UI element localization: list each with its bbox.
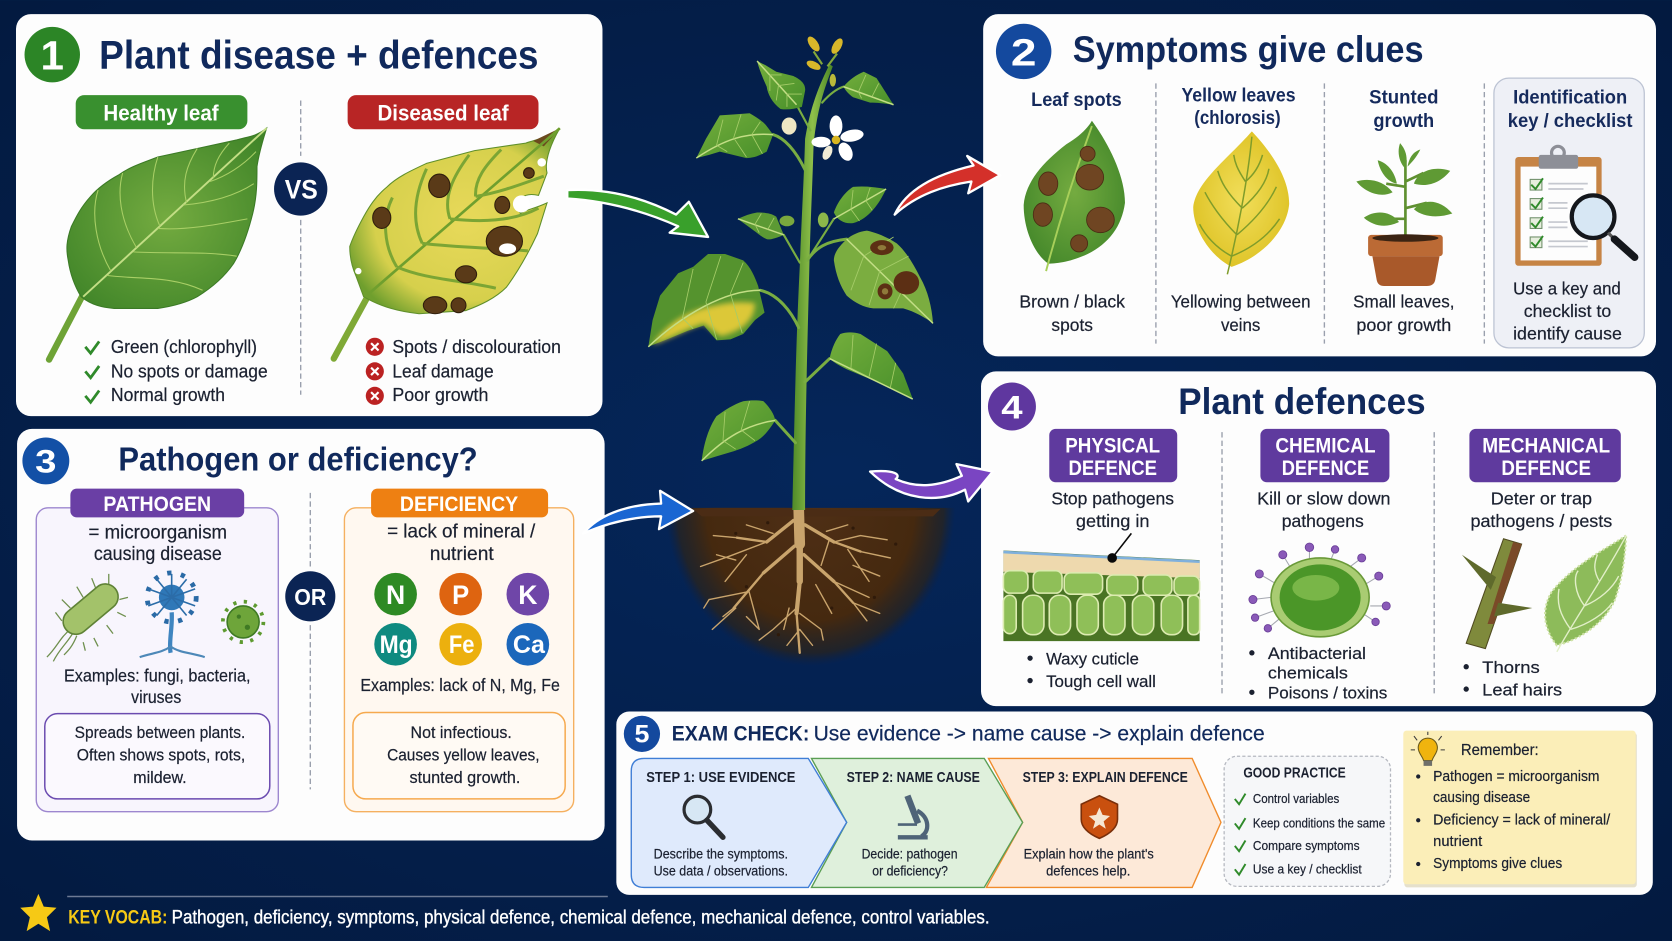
caption: leaf spots: Brown / black: [1019, 291, 1125, 311]
nutrient badges: Fe: [449, 632, 475, 659]
caption: stunted growth: Small leaves,: [1353, 291, 1454, 311]
caption: yellow leaves: [1171, 291, 1311, 335]
badge 1: 1: [41, 33, 64, 79]
badge 4: 4: [1001, 389, 1023, 425]
icon: star: [20, 894, 57, 931]
mechanical defence list: Thorns: [1482, 658, 1540, 677]
column: physical defence: Stop pathogens: [1051, 489, 1174, 509]
label: diseased leaf: [348, 95, 538, 129]
step 3 chevron: Explain how the plant's: [1024, 846, 1154, 862]
deficiency definition: [387, 522, 536, 565]
deficiency note: [353, 713, 565, 799]
label: healthy leaf: Healthy leaf: [103, 101, 219, 126]
list: disease traits: Poor growth: [392, 385, 488, 405]
yellow buds: [805, 35, 845, 87]
pathogen definition: causing disease: [94, 544, 222, 565]
remember note: causing disease: [1433, 789, 1530, 806]
icon: bacterium: [47, 574, 128, 661]
physical defence header: PHYSICAL: [1065, 433, 1160, 457]
caption: yellow leaves: Yellowing between: [1171, 291, 1311, 311]
leaf: top left: [757, 61, 810, 130]
deficiency note: Not infectious.: [411, 723, 512, 742]
panel 3: pathogen or deficiency: [17, 429, 605, 841]
mechanical defence list: Leaf hairs: [1482, 680, 1562, 699]
key vocab text: Pathogen, deficiency, symptoms, physical defence, chemical defence, mechanical defence, control variables.: [172, 908, 990, 929]
illustration: healthy leaf: [49, 128, 267, 360]
diagram: leaf cell layers: [1003, 533, 1200, 641]
physical defence list: Waxy cuticle: [1046, 650, 1139, 669]
lesion spots: [373, 168, 534, 314]
vs badge: [274, 162, 327, 216]
leaf: upper left: [696, 113, 805, 170]
icon: potted plant: [1356, 143, 1452, 286]
pathogen note: mildew.: [133, 768, 187, 787]
box: identification key: Use a key and: [1513, 279, 1621, 299]
nutrient badges: Ca: [513, 632, 545, 659]
remember note: Symptoms give clues: [1433, 855, 1562, 872]
badge 2: [996, 24, 1051, 79]
icon: thorny stem: [1462, 539, 1532, 649]
vs badge: VS: [285, 175, 318, 205]
chemical defence header: [1260, 429, 1389, 482]
nutrient badges: [374, 573, 549, 666]
list: healthy traits: Green (chlorophyll): [111, 337, 257, 357]
box: pathogen: [36, 489, 278, 812]
arrow: red: [895, 156, 1000, 215]
nutrient badges: N: [386, 580, 405, 610]
flower: [811, 115, 865, 163]
leaf: lower right: [805, 332, 913, 399]
step 2 chevron: Decide: pathogen: [862, 846, 958, 862]
badge 3: [22, 437, 69, 484]
badge 1: [25, 27, 80, 82]
step 1 chevron: Describe the symptoms.: [654, 846, 788, 862]
icon: clipboard and magnifier: [1515, 146, 1635, 266]
good practice box: Control variables: [1253, 791, 1339, 806]
heading: plant disease + defences: Plant disease + defences: [99, 33, 538, 77]
deficiency header: DEFICIENCY: [400, 492, 518, 516]
badge 4: [988, 383, 1036, 431]
box: identification key: Identification: [1513, 88, 1627, 109]
column: mechanical defence: pathogens / pests: [1470, 511, 1612, 531]
leaf: yellowing left: [648, 254, 799, 347]
badge 2: 2: [1011, 31, 1036, 74]
badge 3: 3: [35, 444, 57, 480]
mechanical defence header: DEFENCE: [1501, 456, 1591, 480]
panel 1: plant disease + defences: [16, 14, 602, 416]
symptom: stunted growth: [1353, 88, 1454, 335]
badge 5: [624, 716, 660, 752]
step 2 chevron: STEP 2: NAME CAUSE: [847, 769, 980, 786]
icon: magnifier: [684, 796, 723, 837]
arrow: blue: [583, 491, 693, 533]
symptom: leaf spots: [1019, 90, 1125, 335]
remember note: Remember:: [1461, 742, 1539, 759]
chemical defence list: Poisons / toxins: [1268, 684, 1387, 703]
box: identification key: identify cause: [1513, 323, 1622, 343]
panel 4: plant defences: [981, 371, 1656, 706]
or badge: OR: [294, 584, 326, 610]
good practice box: Keep conditions the same: [1253, 816, 1385, 831]
heading: symptoms give clues: Symptoms give clues: [1073, 28, 1424, 70]
good practice box: Compare symptoms: [1253, 838, 1360, 853]
chemical defence list: chemicals: [1268, 663, 1348, 682]
heading: plant defences: Plant defences: [1178, 380, 1426, 422]
heading: exam check: EXAM CHECK:: [672, 721, 809, 745]
symptom: yellow leaves: Yellow leaves: [1181, 86, 1296, 107]
flower bud: [782, 118, 797, 135]
label: diseased leaf: Diseased leaf: [377, 101, 509, 126]
or badge: [285, 571, 335, 621]
pathogen examples: Examples: fungi, bacteria,: [64, 666, 251, 686]
icon: yellow leaf: [1193, 131, 1289, 274]
pathogen header: PATHOGEN: [103, 492, 211, 516]
caption: leaf spots: spots: [1051, 315, 1093, 335]
chemical defence header: CHEMICAL: [1275, 433, 1376, 457]
column: mechanical defence: [1462, 429, 1626, 699]
icon: hairy leaf: [1545, 536, 1626, 652]
step 3 chevron: STEP 3: EXPLAIN DEFENCE: [1023, 769, 1188, 786]
caption: leaf spots: [1019, 291, 1125, 335]
list: healthy traits: Normal growth: [111, 385, 225, 405]
symptom: leaf spots: Leaf spots: [1031, 90, 1122, 111]
chemical defence list: [1249, 644, 1387, 703]
leaf: upper right: [807, 186, 886, 260]
symptom: yellow leaves: (chlorosis): [1194, 108, 1281, 129]
arrow: purple: [870, 464, 993, 501]
soil: [670, 508, 952, 662]
good practice box: [1224, 756, 1390, 886]
key vocab text: KEY VOCAB:: [68, 908, 167, 929]
good practice box: GOOD PRACTICE: [1243, 765, 1346, 782]
pathogen note: Often shows spots, rots,: [77, 746, 245, 765]
step 2 chevron: or deficiency?: [872, 863, 948, 879]
column: chemical defence: Kill or slow down: [1257, 489, 1390, 509]
step 2 chevron: [811, 758, 1023, 887]
pathogen definition: = microorganism: [89, 523, 227, 544]
heading: exam check: Use evidence -> name cause -> explain defence: [814, 721, 1265, 745]
step 1 chevron: [631, 758, 847, 887]
list: healthy traits: [85, 337, 268, 405]
column: physical defence: getting in: [1076, 511, 1150, 531]
badge 5: 5: [634, 721, 649, 748]
deficiency header: [371, 489, 548, 517]
caption: stunted growth: [1353, 291, 1454, 335]
symptom: yellow leaves: [1171, 86, 1311, 335]
remember note: Deficiency = lack of mineral/: [1433, 812, 1611, 829]
icon: light bulb: [1411, 732, 1445, 766]
icon: shield: [1081, 796, 1118, 838]
box: identification key: checklist to: [1524, 301, 1611, 321]
leaf: lower left: [702, 400, 795, 461]
column: chemical defence: pathogens: [1282, 511, 1364, 531]
pathogen examples: viruses: [131, 687, 181, 707]
roots: [701, 508, 890, 653]
remember note: [1403, 731, 1637, 887]
heading: pathogen or deficiency: Pathogen or deficiency?: [118, 442, 478, 479]
icon: spotted leaf: [1024, 121, 1125, 271]
good practice box: Use a key / checklist: [1253, 862, 1362, 877]
deficiency note: Causes yellow leaves,: [387, 746, 540, 765]
deficiency definition: = lack of mineral /: [387, 522, 536, 543]
chemical defence list: Antibacterial: [1268, 644, 1366, 663]
leaf: top right: [822, 72, 894, 105]
list: disease traits: Spots / discolouration: [392, 337, 561, 357]
step 1 chevron: Use data / observations.: [654, 863, 788, 879]
physical defence list: [1027, 650, 1156, 691]
box: identification key: [1494, 78, 1644, 348]
step 3 chevron: [986, 758, 1221, 887]
column: physical defence: [1003, 429, 1200, 691]
mechanical defence list: [1464, 658, 1562, 699]
footer: key vocabulary: [20, 894, 990, 931]
chemical defence header: DEFENCE: [1282, 456, 1369, 480]
step 1 chevron: STEP 1: USE EVIDENCE: [646, 769, 796, 786]
nutrient badges: P: [452, 580, 469, 610]
symptom: stunted growth: Stunted: [1369, 88, 1438, 109]
physical defence header: [1049, 429, 1177, 482]
physical defence list: Tough cell wall: [1046, 672, 1156, 691]
pathogen note: [45, 714, 270, 799]
caption: yellow leaves: veins: [1221, 315, 1261, 335]
step 3 chevron: defences help.: [1046, 863, 1130, 879]
remember note: Pathogen = microorganism: [1433, 768, 1599, 785]
mechanical defence header: MECHANICAL: [1482, 433, 1610, 457]
symptom: stunted growth: growth: [1373, 111, 1434, 132]
box: deficiency: [344, 489, 574, 812]
caption: stunted growth: poor growth: [1356, 315, 1451, 335]
deficiency examples: Examples: lack of N, Mg, Fe: [360, 675, 560, 695]
icon: virus: [223, 602, 263, 642]
list: healthy traits: No spots or damage: [111, 362, 268, 382]
deficiency note: stunted growth.: [409, 768, 520, 787]
panel 5: exam check: [616, 711, 1653, 895]
pathogen note: Spreads between plants.: [75, 723, 245, 742]
stem: [792, 64, 833, 510]
list: disease traits: Leaf damage: [392, 362, 494, 382]
illustration: diseased leaf: [334, 128, 560, 359]
deficiency definition: nutrient: [430, 544, 494, 565]
panel 2: symptoms give clues: [983, 14, 1656, 356]
pathogen examples: [64, 666, 251, 707]
remember note: nutrient: [1433, 833, 1483, 850]
leaf: diseased right: [807, 231, 933, 323]
column: mechanical defence: Deter or trap: [1491, 489, 1592, 509]
pathogen header: [70, 489, 244, 517]
nutrient badges: Mg: [380, 632, 413, 659]
pathogen definition: [89, 523, 227, 565]
nutrient badges: K: [518, 580, 537, 610]
column: chemical defence: [1249, 429, 1390, 703]
mechanical defence header: [1469, 429, 1621, 482]
label: healthy leaf: [76, 95, 247, 129]
list: disease traits: [366, 337, 561, 405]
box: identification key: key / checklist: [1508, 111, 1633, 132]
physical defence header: DEFENCE: [1068, 456, 1157, 480]
leaf: small left: [738, 212, 800, 263]
arrow: green: [567, 190, 708, 237]
icon: fungus: [140, 573, 205, 657]
central plant illustration: [648, 35, 955, 666]
icon: microscope: [898, 796, 928, 837]
diagram: chemical cell: [1249, 543, 1390, 637]
